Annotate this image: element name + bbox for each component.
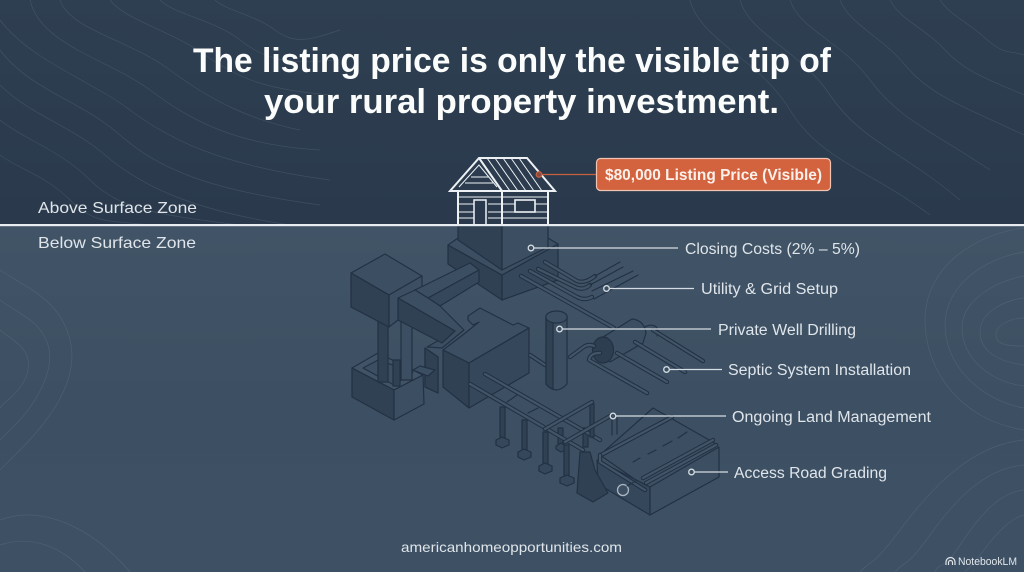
house icon [450,158,555,224]
trestle and frame [470,374,617,486]
background: above surface zone [0,0,1024,225]
label: ongoing land management: Ongoing Land Management [732,409,932,426]
central block [443,308,529,408]
connecting duct [398,263,479,393]
source url: americanhomeopportunities.com [401,539,622,555]
label: access road grading: Access Road Grading [734,465,887,482]
heading: above surface zone: Above Surface Zone [38,200,197,217]
title: your rural property investment. [264,83,779,121]
background: below surface zone [0,225,1024,572]
access road [577,408,719,515]
notebooklm badge: NotebookLM [958,556,1017,568]
label: septic system installation: Septic System Installation [728,362,911,379]
label: private well drilling [557,322,856,339]
title: The listing price is only the visible tip of [193,42,832,80]
label: utility and grid setup: Utility & Grid Setup [701,281,838,298]
left tower block [351,254,424,420]
heading: below surface zone: Below Surface Zone [38,235,196,252]
label: private well drilling: Private Well Drilling [718,322,856,339]
septic tank and pipes [570,319,703,393]
label: ongoing land management [610,409,932,426]
label: closing costs: Closing Costs (2% – 5%) [685,241,860,258]
horizon line [0,224,1024,226]
label: closing costs [528,241,860,258]
callout: listing price: $80,000 Listing Price (Visible) [605,167,822,184]
callout: listing price [536,158,830,190]
label: utility and grid setup [604,281,838,298]
foundation under house [448,225,558,300]
well cylinder [530,311,567,390]
utility pipes [521,262,638,328]
underground infrastructure illustration [351,225,719,515]
title [193,42,832,121]
